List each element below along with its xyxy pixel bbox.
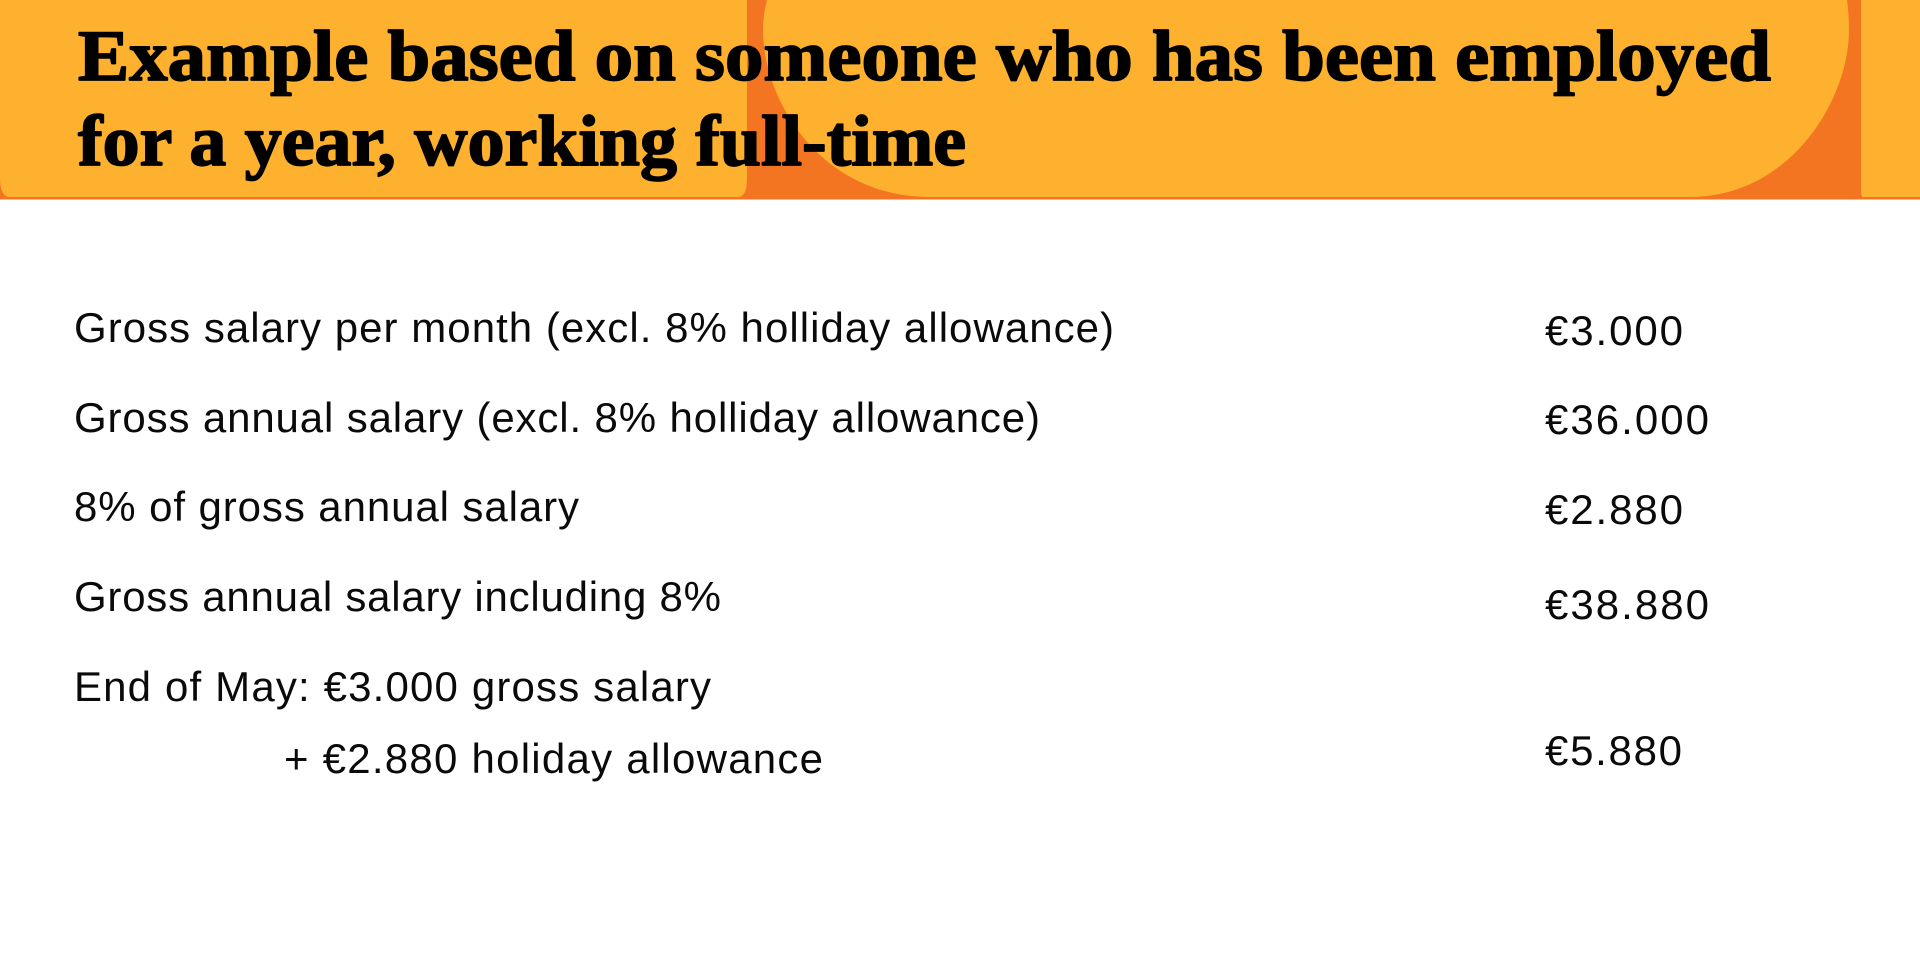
header band (0, 0, 1920, 200)
row: gross annual salary (74, 394, 1709, 443)
header left panel (0, 0, 747, 197)
title (78, 16, 1771, 181)
title: Example based on someone who has been employed (78, 16, 1771, 96)
header right panel (1861, 0, 1920, 197)
header centre blob (763, 0, 1849, 197)
row: end of May payment: + €2.880 holiday allowance (284, 735, 823, 782)
row: gross salary per month: €3.000 (1545, 307, 1683, 354)
title: for a year, working full-time (78, 101, 966, 181)
row: end of May payment: End of May: €3.000 gross salary (74, 663, 711, 710)
row: gross annual salary including 8% (74, 573, 1709, 628)
row: gross salary per month (74, 304, 1683, 354)
salary table (74, 304, 1709, 782)
row: end of May payment (74, 663, 1682, 782)
row: 8% of gross annual salary (74, 483, 1683, 533)
row: gross annual salary including 8%: €38.880 (1545, 581, 1709, 628)
row: gross salary per month: Gross salary per month (excl. 8% holliday allowance) (74, 304, 1114, 351)
row: gross annual salary: €36.000 (1545, 396, 1709, 443)
row: gross annual salary: Gross annual salary (excl. 8% holliday allowance) (74, 394, 1040, 441)
row: 8% of gross annual salary: €2.880 (1545, 486, 1683, 533)
row: gross annual salary including 8%: Gross annual salary including 8% (74, 573, 721, 620)
row: end of May payment: €5.880 (1545, 727, 1682, 774)
row: 8% of gross annual salary: 8% of gross annual salary (74, 483, 579, 530)
